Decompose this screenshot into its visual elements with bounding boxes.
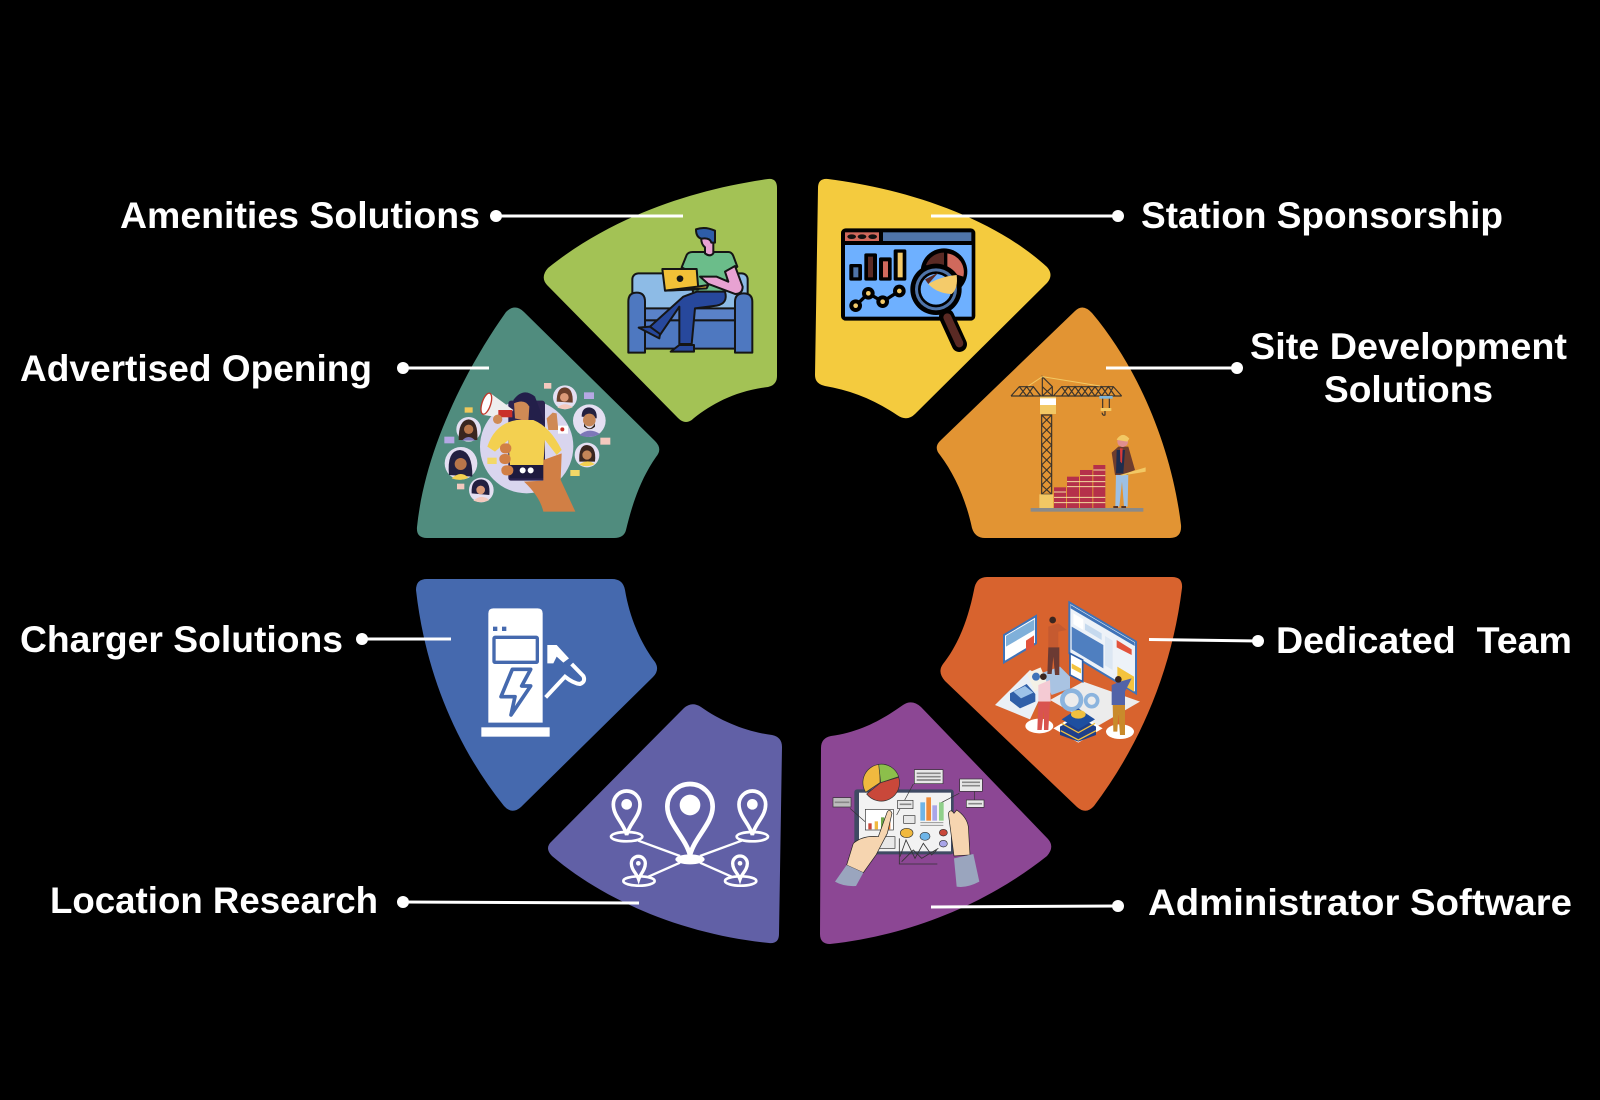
panel: Administrator Software bbox=[820, 702, 1051, 944]
label: Site Development Solutions: Solutions bbox=[1324, 369, 1493, 410]
gears bbox=[1062, 691, 1081, 709]
teal wedge bbox=[417, 308, 659, 538]
stacks bbox=[1010, 684, 1035, 708]
icon: connected location pins bbox=[611, 784, 768, 886]
label: Advertised Opening: Advertised Opening bbox=[20, 348, 372, 389]
connector: Amenities Solutions bbox=[490, 210, 683, 222]
label: Site Development Solutions bbox=[1250, 326, 1567, 410]
label: Station Sponsorship: Station Sponsorship bbox=[1141, 195, 1503, 236]
icon: woman with megaphone and followers bbox=[444, 383, 610, 512]
panel: Amenities Solutions bbox=[544, 179, 777, 422]
panel: Station Sponsorship bbox=[815, 179, 1050, 418]
connector: Charger Solutions bbox=[356, 633, 451, 645]
icon: analytics dashboard with magnifier bbox=[841, 228, 975, 344]
panel: Advertised Opening bbox=[417, 308, 659, 538]
chat bubbles bbox=[444, 383, 610, 489]
icon: EV charging station bbox=[481, 608, 584, 737]
icon: tower crane, bricks and engineer bbox=[1011, 377, 1146, 512]
green wedge bbox=[544, 179, 777, 422]
panel: Site Development Solutions bbox=[937, 307, 1181, 538]
connector: Site Development Solutions bbox=[1106, 362, 1243, 374]
dark orange wedge bbox=[940, 577, 1182, 811]
label: Location Research: Location Research bbox=[50, 880, 378, 921]
label: Charger Solutions: Charger Solutions bbox=[20, 619, 343, 660]
panel: Location Research bbox=[548, 704, 782, 943]
icon: man with laptop on sofa bbox=[628, 228, 752, 353]
connector: Administrator Software bbox=[931, 900, 1124, 912]
panel: Dedicated Team bbox=[940, 577, 1182, 811]
connector: Location Research bbox=[397, 896, 639, 908]
label: Administrator Software: Administrator Software bbox=[1148, 882, 1572, 923]
icon: isometric team building a website bbox=[995, 602, 1140, 743]
panel: Charger Solutions bbox=[416, 579, 657, 811]
yellow wedge bbox=[815, 179, 1050, 418]
people bbox=[1037, 617, 1132, 735]
blue wedge bbox=[416, 579, 657, 811]
purple wedge bbox=[820, 702, 1051, 944]
connector: Station Sponsorship bbox=[931, 210, 1124, 222]
orange wedge bbox=[937, 307, 1181, 538]
connector: Advertised Opening bbox=[397, 362, 489, 374]
connector: Dedicated Team bbox=[1149, 635, 1264, 647]
label: Site Development Solutions: Site Development bbox=[1250, 326, 1567, 367]
label: Dedicated Team: Dedicated Team bbox=[1276, 620, 1572, 661]
label: Amenities Solutions: Amenities Solutions bbox=[120, 195, 480, 236]
indigo wedge bbox=[548, 704, 782, 943]
icon: hands on analytics tablet bbox=[833, 764, 984, 887]
avatars bbox=[445, 385, 606, 502]
